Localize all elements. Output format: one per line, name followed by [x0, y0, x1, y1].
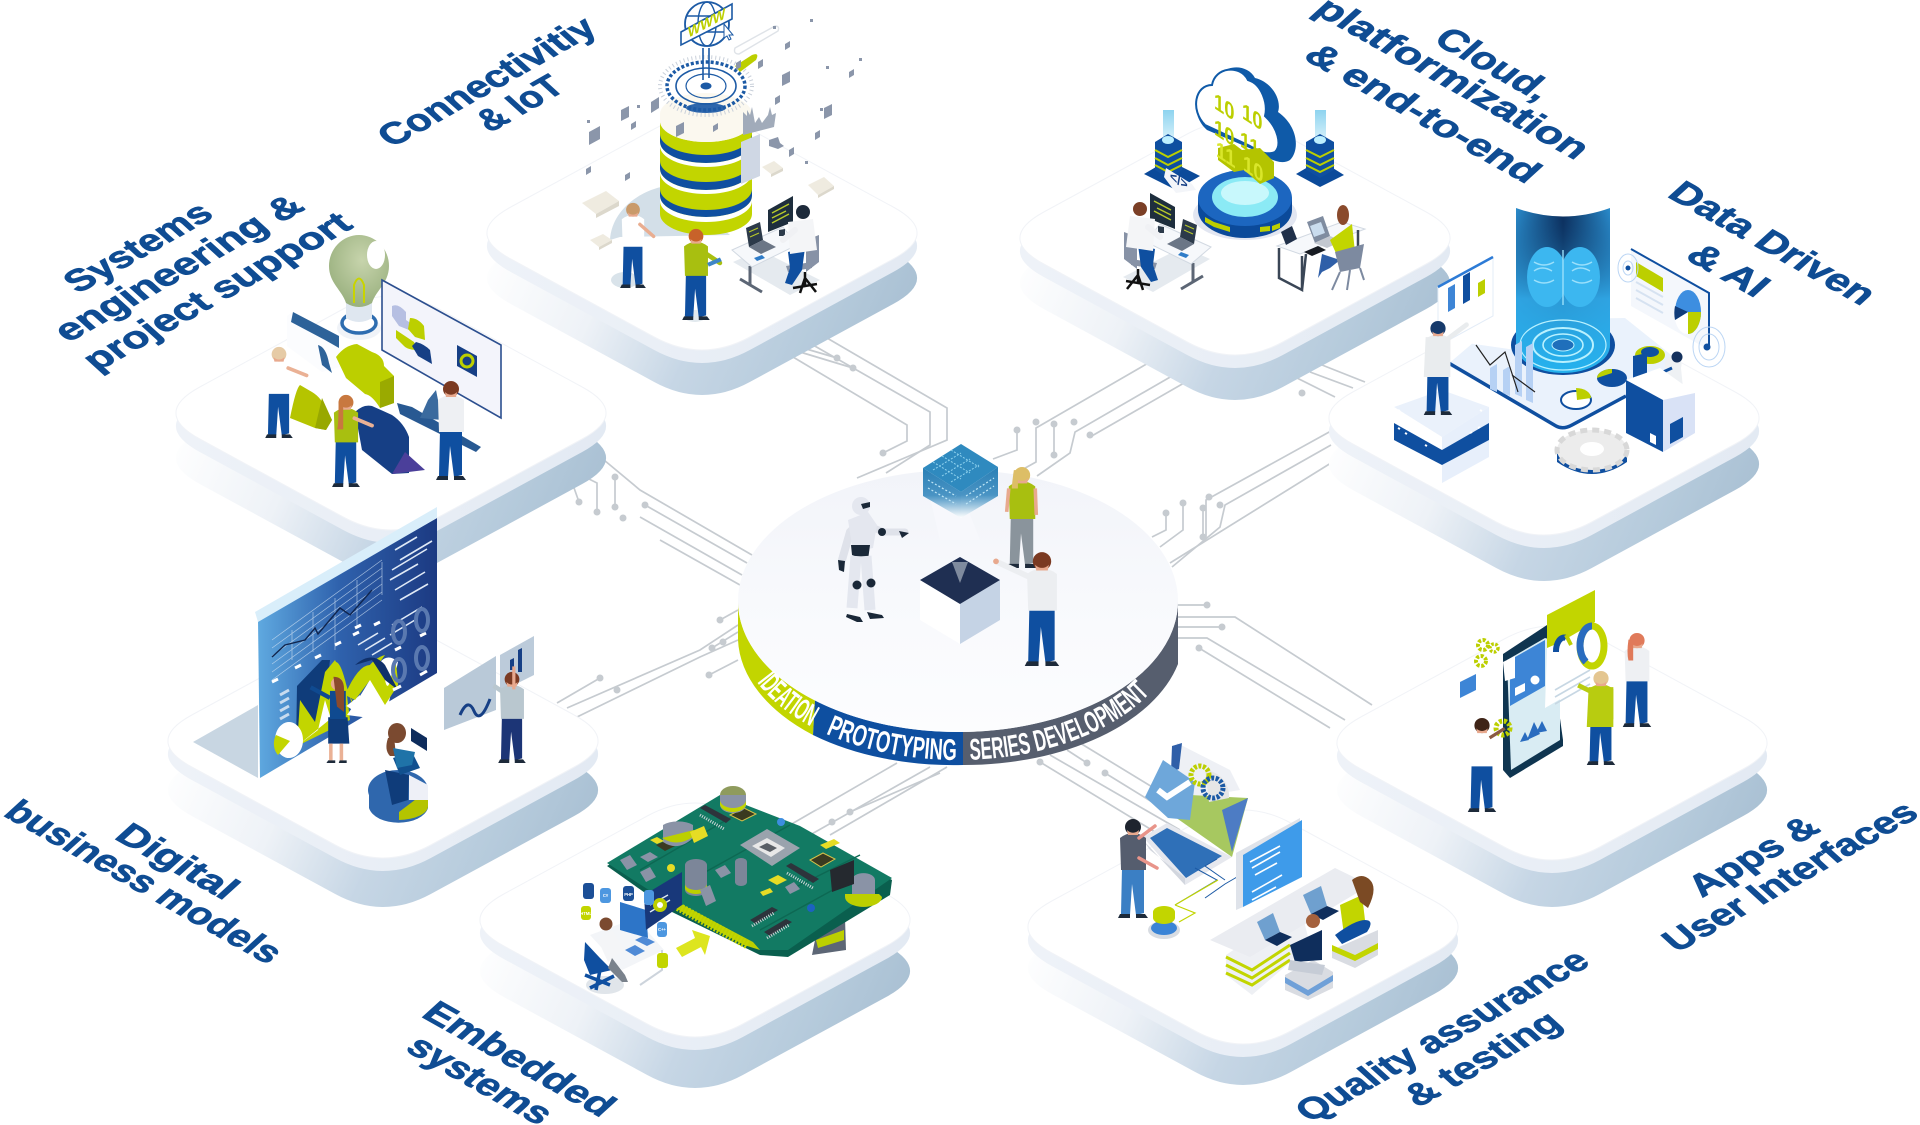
panel: data driven and AI platform: [1329, 208, 1759, 581]
heading: quality label: Quality assurance: [1287, 943, 1598, 1125]
icons: programming language tags: HTML: [580, 911, 592, 916]
chart: left bar panel: [1438, 257, 1493, 346]
illustration: laptop with check mark and gears: [1143, 743, 1248, 885]
heading: connectivity label: Connectivitiy: [369, 10, 605, 154]
chart: right pie panel: [1618, 249, 1725, 367]
chart: central bars: [1476, 341, 1665, 409]
illustration: server towers: [1144, 110, 1344, 190]
icon: cloud with binary digits: 10: [1242, 98, 1262, 136]
chart: large dashboard screen: [255, 507, 437, 778]
illustration: seated engineer desk: [1123, 193, 1211, 292]
people: app team: [1468, 633, 1651, 812]
icon: cloud with binary digits: [1196, 67, 1296, 188]
illustration: smartphone with screens: [1503, 590, 1607, 778]
person: woman with olive shirt: [1007, 467, 1037, 568]
disk labels: [758, 672, 1147, 760]
disk labels: PROTOTYPING: [826, 715, 956, 760]
people: two engineers: [611, 203, 722, 322]
panel: systems engineering platform: [176, 235, 606, 575]
heading: digital label: Digital: [107, 817, 247, 906]
icons: programming language tags: C++: [658, 927, 667, 932]
illustration: floor shadow: [193, 705, 258, 778]
heading: cloud label: Cloud,: [1426, 21, 1561, 107]
panel: connectivity platform: [487, 2, 917, 395]
panel: central disk: [738, 444, 1178, 766]
arrow: towards the board: [676, 930, 710, 957]
illustration: collaboration table with testers: [1210, 868, 1378, 1000]
illustration: puzzle blocks: [290, 344, 481, 474]
panel: apps and user interfaces platform: [1337, 590, 1767, 907]
person: tester: [1118, 819, 1157, 918]
illustration: server cube with scientist: [1394, 321, 1489, 483]
illustration: wiring with gear: [1148, 859, 1237, 939]
illustration: light bulb: [329, 235, 389, 340]
circuit traces connecting platforms to the central disk: [557, 338, 1372, 835]
icon: code tag: </>: [1170, 167, 1188, 193]
heading: data driven label: Data Driven: [1660, 175, 1885, 312]
icon: cloud with binary digits: 10: [1243, 150, 1263, 188]
icon: code tag: [1164, 167, 1196, 193]
illustration: seated analyst on pie seat: [368, 723, 428, 823]
icon: cloud with binary digits: 10: [1214, 114, 1234, 152]
icon: gears: [1460, 640, 1510, 735]
illustration: control box with operator: [1626, 352, 1695, 452]
illustration: open box: [920, 557, 1000, 644]
heading: digital label: business models: [0, 794, 291, 971]
icons: programming language tags: [580, 883, 668, 968]
heading: systems label: Systems: [55, 196, 222, 300]
illustration: robot: [838, 497, 909, 622]
icons: programming language tags: PHP: [624, 892, 633, 897]
icons: programming language tags: C#: [603, 893, 609, 898]
disk top: [738, 470, 1178, 732]
illustration: circuit board: [607, 795, 892, 957]
illustration: radar rings and antenna: [660, 48, 752, 115]
illustration: hub disk: [1193, 170, 1297, 240]
illustration: chat bubble: [287, 312, 340, 373]
heading: embedded label: Embedded: [414, 995, 624, 1124]
illustration: puzzle screen: [382, 280, 501, 418]
people: three team members: [265, 347, 466, 487]
person: woman presenting: [311, 677, 349, 763]
illustration: code monitor: [1236, 818, 1302, 910]
illustration: gear: [1557, 430, 1627, 474]
illustration: data cube: [923, 444, 998, 540]
heading: systems label: engineering &: [45, 188, 313, 349]
panel: embedded systems platform: [480, 786, 910, 1088]
heading: apps label: Apps &: [1679, 809, 1828, 904]
icon: www globe: [681, 2, 733, 46]
icon: www globe: WWW: [688, 5, 726, 42]
disk labels: SERIES DEVELOPMENT: [970, 678, 1147, 760]
heading: data driven label: & AI: [1678, 237, 1778, 304]
illustration: login bubbles: [734, 26, 779, 72]
icon: cloud with binary digits: 11: [1216, 136, 1235, 174]
heading: cloud label: & end-to-end: [1296, 37, 1549, 190]
icon: cloud with binary digits: 10: [1214, 88, 1234, 126]
chart: floating panels with analyst: [444, 636, 534, 763]
person: man pointing: [993, 552, 1059, 666]
disk labels: IDEATION: [758, 672, 820, 726]
icon: cloud with binary digits: 11: [1240, 126, 1259, 164]
illustration: board capacitors and components: [620, 786, 882, 912]
panel: quality assurance platform: [1028, 743, 1458, 1085]
heading: connectivity label: & IoT: [467, 69, 573, 139]
heading: quality label: & testing: [1395, 1005, 1570, 1114]
illustration: woman at desk: [1277, 205, 1365, 290]
illustration: developer at workstation: [584, 872, 682, 994]
illustration: brain hologram cylinder: [1511, 208, 1615, 375]
panel: digital business models platform: [168, 507, 598, 907]
illustration: storage bricks: [582, 161, 834, 250]
decoration: data particles: [586, 19, 862, 184]
panel: cloud platform: [1020, 67, 1450, 400]
illustration: desk with seated engineer: [732, 196, 820, 295]
disk side bands: [738, 601, 1178, 765]
heading: systems label: project support: [74, 206, 361, 378]
illustration: data cylinder: [610, 93, 752, 240]
illustration: dashboard tray: [1446, 300, 1680, 428]
